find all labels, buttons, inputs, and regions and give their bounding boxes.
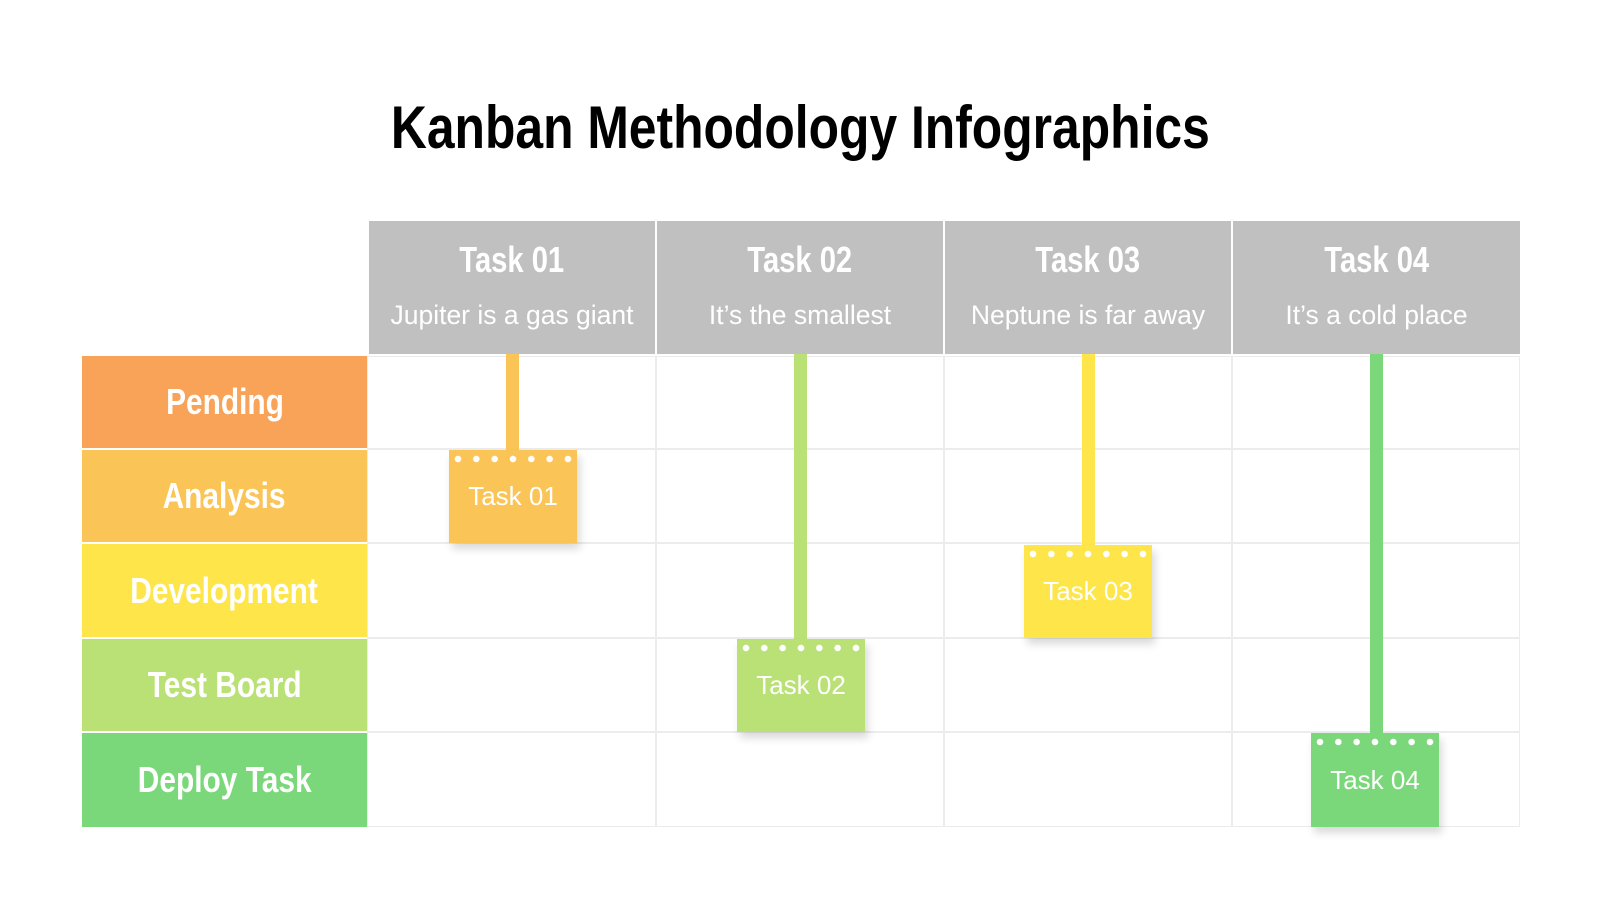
title: Kanban Methodology Infographics [391,94,1209,161]
header: Task 01: Jupiter is a gas giant [390,300,634,330]
label: Test Board: Test Board [148,664,301,705]
card: Task 04: Task 04 [1330,764,1420,794]
header: Task 02 [657,221,943,354]
label: Analysis [82,450,367,542]
stem: task 01 [506,354,519,452]
label: Development: Development [131,570,318,610]
label: Pending [82,356,367,448]
card: Task 02 [737,639,865,732]
card: Task 01 [449,450,577,543]
label: Test Board [82,639,367,731]
grid [367,356,1520,827]
card: Task 03 [1024,545,1152,638]
header: Task 01 [369,221,655,354]
card: Task 01: Task 01 [468,481,558,511]
header: Task 02: It’s the smallest [709,300,891,330]
header: Task 04: It’s a cold place [1285,300,1468,330]
header: Task 01: Task 01 [460,239,564,280]
card: Task 02: Task 02 [756,670,846,700]
stem: task 04 [1370,354,1383,736]
card: Task 03: Task 03 [1043,576,1133,606]
stem: task 03 [1082,354,1095,546]
label: Deploy Task: Deploy Task [138,759,311,800]
header: Task 03: Neptune is far away [971,300,1205,330]
header: Task 02: Task 02 [748,239,852,280]
card: Task 04 [1311,733,1439,827]
stem: task 02 [794,354,807,642]
header: Task 03 [945,221,1231,354]
label: Pending: Pending [166,381,283,422]
label: Deploy Task [82,733,367,827]
header: Task 04: Task 04 [1324,239,1429,280]
header: Task 04 [1233,221,1520,354]
header: Task 03: Task 03 [1036,239,1140,280]
label: Development [82,544,367,637]
label: Analysis: Analysis [163,475,286,516]
